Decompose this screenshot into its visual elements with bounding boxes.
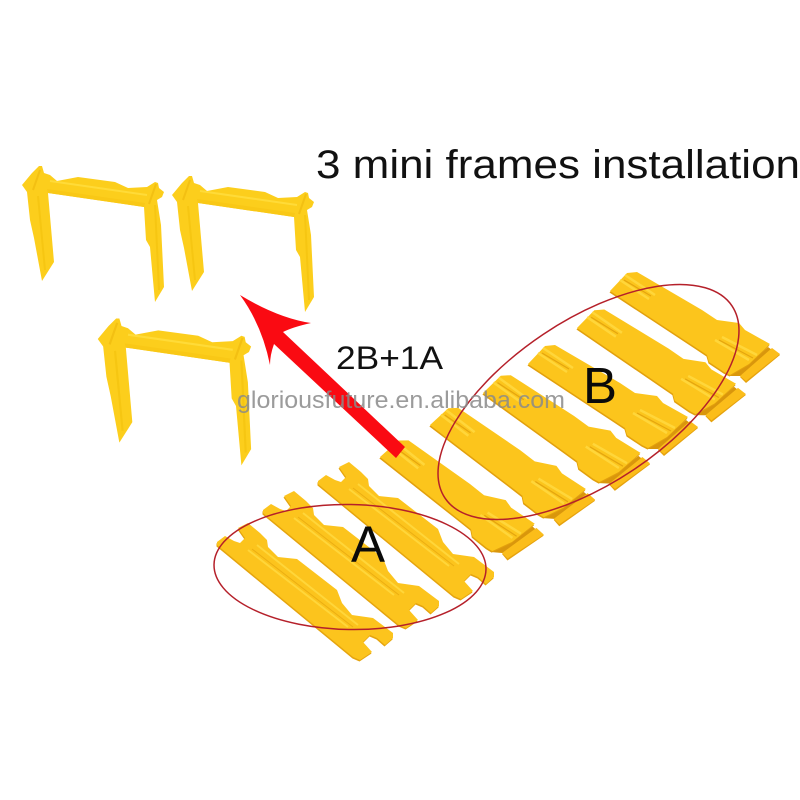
B strip 2 bbox=[423, 406, 601, 529]
B strip 3 bbox=[478, 374, 654, 492]
icon: assembled mini frame top right bbox=[172, 176, 314, 312]
B strip 6 bbox=[610, 272, 780, 383]
B strip 4 bbox=[528, 345, 698, 456]
label: 2B+1A: 2B+1A bbox=[336, 340, 444, 376]
ellipse: group B highlight bbox=[400, 238, 777, 566]
panel: B strips bbox=[371, 272, 780, 563]
icon: assembled mini frame bottom bbox=[98, 318, 251, 465]
panel: A strips bbox=[216, 462, 494, 662]
title: 3 mini frames installation bbox=[316, 143, 800, 187]
B strip 5 bbox=[575, 309, 747, 423]
watermark: gloriousfuture.en.alibaba.com bbox=[237, 387, 565, 414]
A strip 3 bbox=[318, 462, 494, 600]
B strip 1 under arrow bbox=[371, 438, 551, 563]
A strip 2 bbox=[262, 491, 439, 630]
A strip 1 bbox=[216, 523, 393, 662]
ellipse: group A highlight bbox=[213, 502, 487, 632]
label: B: B bbox=[583, 357, 617, 414]
arrow: red pointing to frames bbox=[240, 295, 405, 458]
label: A: A bbox=[351, 516, 385, 573]
icon: assembled mini frame top left bbox=[22, 166, 164, 302]
